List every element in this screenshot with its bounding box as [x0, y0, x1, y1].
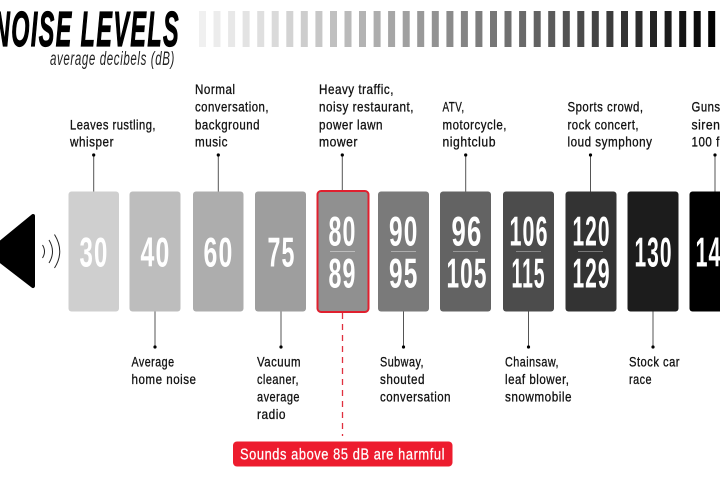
label: 120-129 dB: loud symphony	[568, 134, 652, 150]
label: 106-115 dB: leaf blower,	[505, 371, 570, 387]
box: 96-105 dB: 96	[452, 208, 482, 254]
label: 96-105 dB: nightclub	[442, 134, 496, 150]
box: 120-129 dB	[566, 192, 616, 312]
label: 80-89 dB: mower	[319, 134, 358, 150]
label: 75 dB: average	[257, 389, 300, 405]
gradient tick strip	[199, 11, 715, 47]
label: 120-129 dB: Sports crowd,	[568, 99, 644, 115]
subtitle: average decibels (dB)	[50, 49, 175, 70]
label: 75 dB: radio	[257, 406, 286, 422]
box: 30 dB: 30	[80, 228, 108, 276]
label: 80-89 dB: power lawn	[319, 116, 383, 132]
label: 75 dB: Vacuum	[257, 354, 301, 370]
label: 40 dB: home noise	[132, 371, 196, 387]
label: 40 dB	[132, 354, 196, 387]
box: 90-95 dB: 95	[389, 250, 418, 296]
box: 106-115 dB	[503, 192, 554, 312]
label: 96-105 dB	[442, 99, 507, 150]
box: 90-95 dB	[378, 192, 429, 312]
label: 130 dB	[629, 354, 680, 387]
label: 120-129 dB: rock concert,	[568, 116, 639, 132]
text: NOISE LEVELS	[0, 3, 180, 57]
label: 40 dB: Average	[132, 354, 174, 370]
callout: harmful threshold: Sounds above 85 dB are harmful	[240, 446, 445, 464]
label: 80-89 dB	[319, 81, 414, 150]
box: 140 dB	[690, 192, 720, 312]
label: 80-89 dB: noisy restaurant,	[319, 99, 414, 115]
label: 130 dB: race	[629, 371, 652, 387]
label: 120-129 dB	[568, 99, 652, 150]
label: 60 dB	[195, 81, 269, 150]
box: 75 dB: 75	[268, 228, 296, 276]
label: 90-95 dB: shouted	[380, 371, 425, 387]
label: 140 dB	[692, 99, 720, 150]
label: 106-115 dB: Chainsaw,	[505, 354, 559, 370]
label: 30 dB	[69, 116, 156, 150]
label: 30 dB: whisper	[69, 134, 114, 150]
box: 120-129 dB: 129	[572, 250, 610, 296]
label: 96-105 dB: ATV,	[442, 99, 464, 115]
box: 60 dB: 60	[204, 228, 234, 276]
box: 90-95 dB: 90	[389, 208, 418, 254]
label: 90-95 dB	[380, 354, 451, 405]
box: 130 dB: 130	[634, 228, 672, 276]
label: 60 dB: conversation,	[195, 99, 269, 115]
label: 130 dB: Stock car	[629, 354, 680, 370]
box: 40 dB	[130, 192, 180, 312]
box: 96-105 dB: 105	[446, 250, 488, 296]
leader lines and dots	[92, 153, 717, 349]
box: 80-89 dB highlighted: 80	[328, 208, 356, 254]
label: 30 dB: Leaves rustling,	[70, 116, 156, 132]
label: 60 dB: Normal	[195, 81, 236, 97]
box: 130 dB	[628, 192, 678, 312]
box: 106-115 dB: 115	[512, 250, 546, 296]
box: 80-89 dB highlighted	[318, 191, 368, 312]
box: 106-115 dB: 106	[510, 208, 548, 254]
label: 90-95 dB: Subway,	[380, 354, 424, 370]
label: 75 dB: cleaner,	[257, 371, 299, 387]
label: 60 dB: music	[195, 134, 228, 150]
box: 60 dB	[193, 192, 244, 312]
label: 60 dB: background	[195, 116, 260, 132]
label: 80-89 dB: Heavy traffic,	[319, 81, 394, 97]
box: 30 dB	[68, 192, 119, 312]
box: 96-105 dB	[440, 192, 491, 312]
label: 106-115 dB: snowmobile	[505, 389, 572, 405]
callout: harmful threshold	[233, 442, 452, 466]
label: 90-95 dB: conversation	[380, 389, 451, 405]
box: 120-129 dB: 120	[572, 208, 610, 254]
box: 75 dB	[255, 192, 306, 312]
label: 96-105 dB: motorcycle,	[442, 116, 507, 132]
box: 80-89 dB highlighted: 89	[328, 250, 356, 296]
box: 40 dB: 40	[140, 228, 170, 276]
dashed red line	[342, 313, 344, 436]
icon: speaker	[0, 216, 60, 286]
label: 106-115 dB	[505, 354, 572, 405]
label: 75 dB	[257, 354, 301, 422]
